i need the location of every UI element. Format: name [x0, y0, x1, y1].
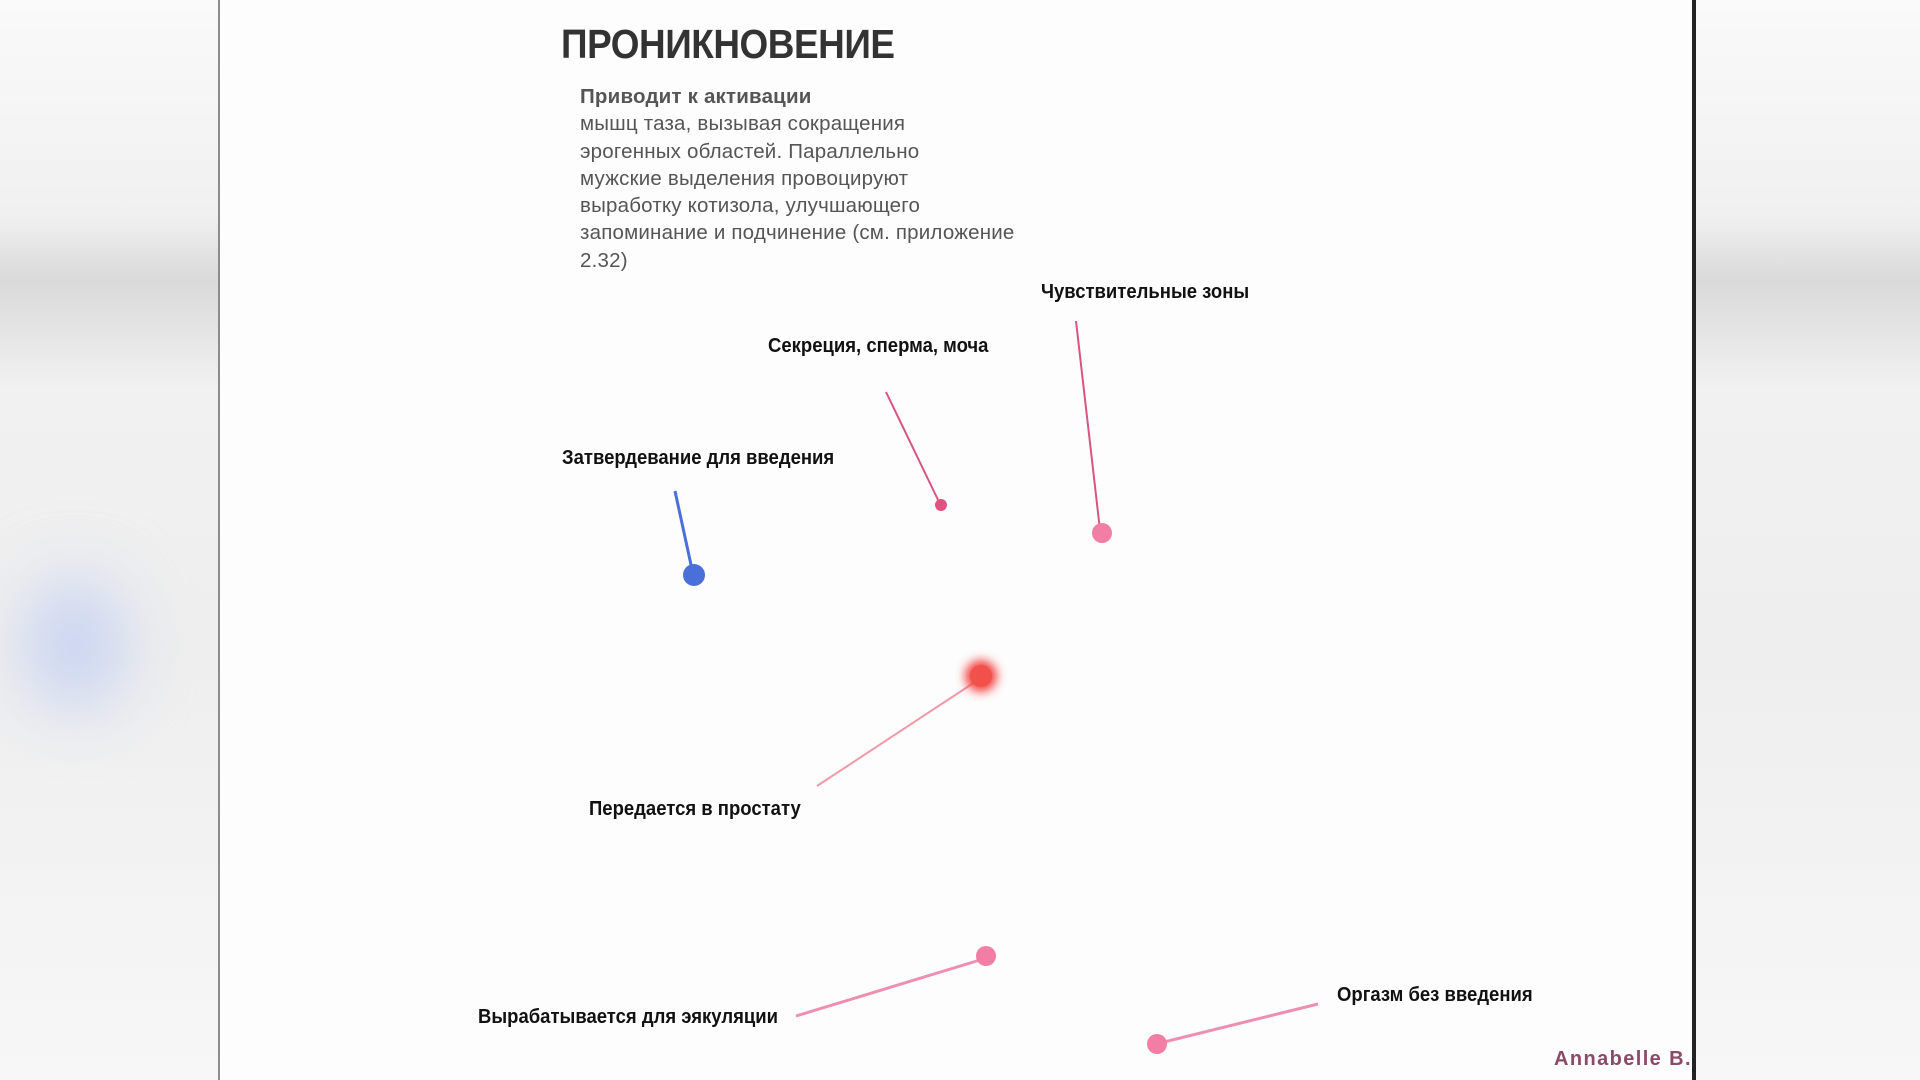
artist credit: Annabelle B. [1554, 1048, 1692, 1070]
marker: prostate [817, 660, 997, 786]
text block: description [580, 85, 1014, 272]
text block: description: эрогенных областей. Параллельно [580, 140, 919, 163]
text block: description: запоминание и подчинение (см. приложение [580, 221, 1014, 244]
text block: description: Приводит к активации [580, 85, 812, 108]
text block: description: мужские выделения провоцируют [580, 167, 908, 190]
label: produced for ejaculation: Вырабатывается для эякуляции [478, 1006, 778, 1028]
label: orgasm without penetration: Оргазм без введения [1337, 984, 1533, 1006]
left blurred margin [0, 0, 218, 1080]
marker: orgasm [1147, 1004, 1318, 1054]
marker: secretions [886, 392, 947, 511]
marker: ejaculation [796, 946, 996, 1016]
label: transmitted to prostate: Передается в простату [589, 798, 801, 820]
label: hardening: Затвердевание для введения [562, 447, 834, 469]
right blurred margin [1696, 0, 1920, 1080]
label: sensitive zones: Чувствительные зоны [1041, 281, 1249, 303]
panel: white drawing sheet [218, 0, 1696, 1080]
marker: sensitive zones [1076, 321, 1112, 543]
marker: hardening [675, 491, 705, 586]
text block: description: мышц таза, вызывая сокращения [580, 112, 905, 135]
text block: description: выработку котизола, улучшающего [580, 194, 920, 217]
label: secretions: Секреция, сперма, моча [768, 335, 988, 357]
text block: description: 2.32) [580, 249, 628, 272]
title: ПРОНИКНОВЕНИЕ [561, 21, 895, 67]
